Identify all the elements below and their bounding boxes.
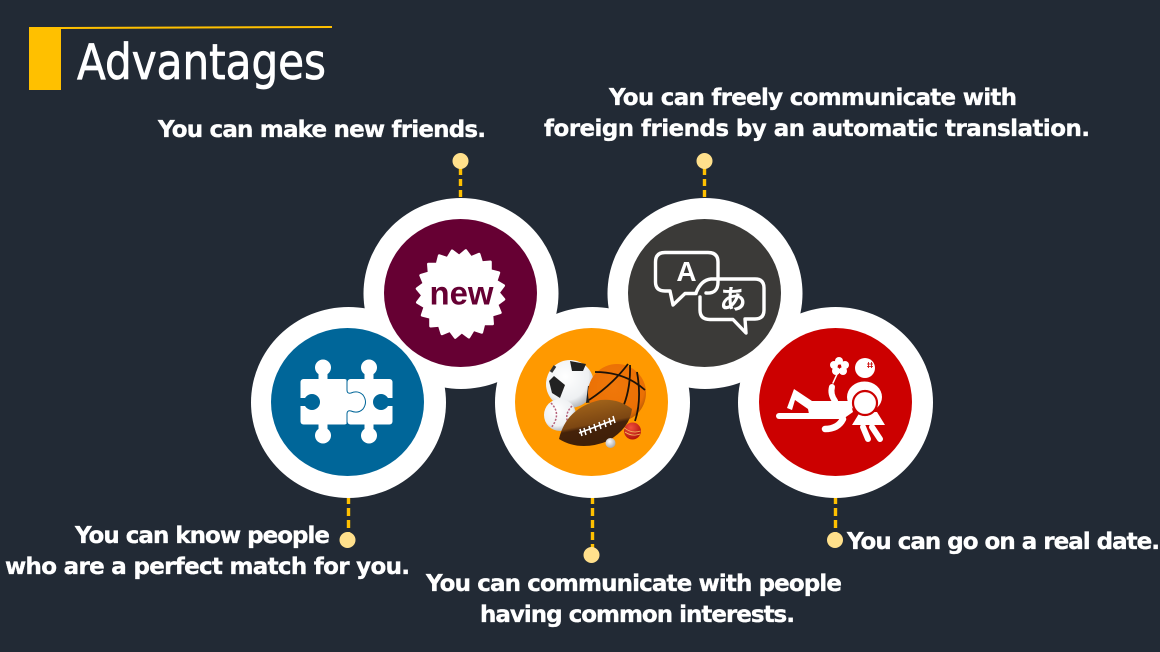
icon: soccer ball [546, 360, 594, 408]
title [29, 26, 332, 91]
text: common interests: You can communicate with people [425, 571, 842, 597]
icon: translation bubbles: A [676, 256, 697, 287]
icon: translation bubbles: あ [720, 278, 746, 317]
circle: new [384, 219, 537, 367]
woman [847, 358, 885, 439]
connector: perfect match [340, 496, 356, 548]
circle: puzzle [271, 328, 424, 476]
icon: puzzle pieces [299, 360, 394, 444]
icon: date couple [779, 357, 885, 439]
text: perfect match: who are a perfect match for you. [5, 554, 410, 580]
white rings behind circles [251, 198, 933, 498]
circle: translation [628, 219, 781, 367]
icon: new badge: new [430, 274, 494, 312]
icon: american football [559, 400, 632, 446]
text: real date: You can go on a real date. [846, 529, 1160, 555]
icon: translation bubbles [656, 252, 764, 333]
connector: new friends [452, 153, 468, 200]
text: perfect match: You can know people [74, 523, 330, 549]
icon: golf ball [606, 438, 616, 448]
title: Advantages [77, 34, 326, 91]
flower [830, 357, 849, 375]
icon: baseball [544, 399, 576, 431]
man lying [779, 372, 853, 429]
text: translation [544, 85, 1090, 142]
icon: sports balls [544, 360, 646, 448]
icon: basketball [588, 364, 646, 422]
text: translation: foreign friends by an automatic translation. [544, 116, 1090, 142]
text: perfect match [5, 523, 410, 580]
icon: new badge [412, 245, 509, 343]
connector: common interests [584, 496, 600, 563]
circle: sports [515, 328, 668, 476]
text: common interests: having common interests. [480, 602, 795, 628]
connector: real date [827, 496, 843, 548]
text: translation: You can freely communicate with [608, 85, 1017, 111]
icon: cricket ball [624, 422, 641, 440]
text: new friends: You can make new friends. [157, 117, 486, 143]
connector: translation [696, 153, 712, 200]
circle: date [759, 328, 912, 476]
text: common interests [425, 571, 842, 628]
